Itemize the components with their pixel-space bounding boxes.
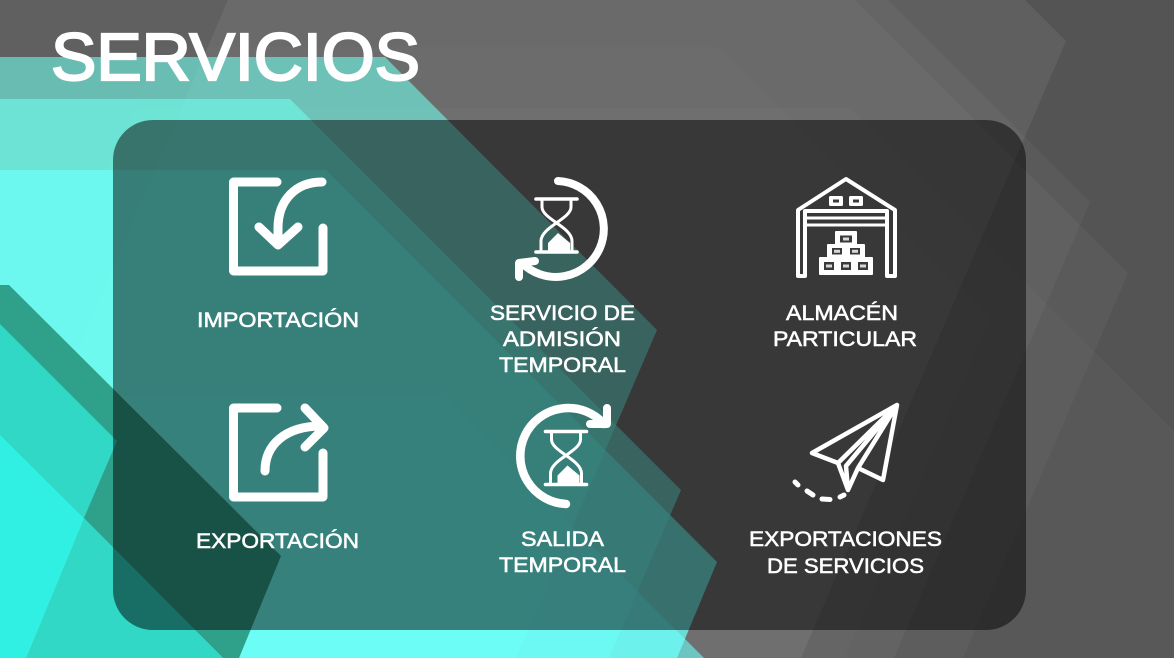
icon: importación: [234, 182, 323, 271]
background: dark teal corner polygons: [0, 285, 281, 658]
label: almacén particular: PARTICULAR: [773, 328, 917, 351]
label: servicio de admisión temporal: TEMPORAL: [499, 354, 626, 377]
icon: servicio de admisión temporal: [519, 181, 604, 277]
icon: salida temporal: [520, 408, 607, 504]
icon: paper plane: [795, 405, 897, 500]
label: importación: IMPORTACIÓN: [197, 309, 359, 332]
background: teal polygons: [0, 57, 717, 658]
label: exportaciones de servicios: DE SERVICIOS: [767, 555, 924, 578]
panel: services background: [113, 120, 1026, 630]
label: almacén particular: ALMACÉN: [786, 302, 898, 325]
label: servicio de admisión temporal: ADMISIÓN: [503, 328, 621, 351]
label: salida temporal: [499, 528, 626, 577]
icon: exportación: [234, 408, 324, 497]
label: salida temporal: TEMPORAL: [499, 554, 626, 577]
label: exportación: EXPORTACIÓN: [196, 530, 359, 553]
label: exportaciones de servicios: EXPORTACIONES: [749, 528, 942, 551]
title: SERVICIOS: [51, 20, 420, 95]
label: exportaciones de servicios: [749, 528, 942, 578]
label: servicio de admisión temporal: [490, 302, 635, 377]
label: almacén particular: [773, 302, 917, 351]
icon: almacén particular: [798, 179, 895, 276]
label: servicio de admisión temporal: SERVICIO DE: [490, 302, 635, 325]
label: salida temporal: SALIDA: [521, 528, 604, 551]
